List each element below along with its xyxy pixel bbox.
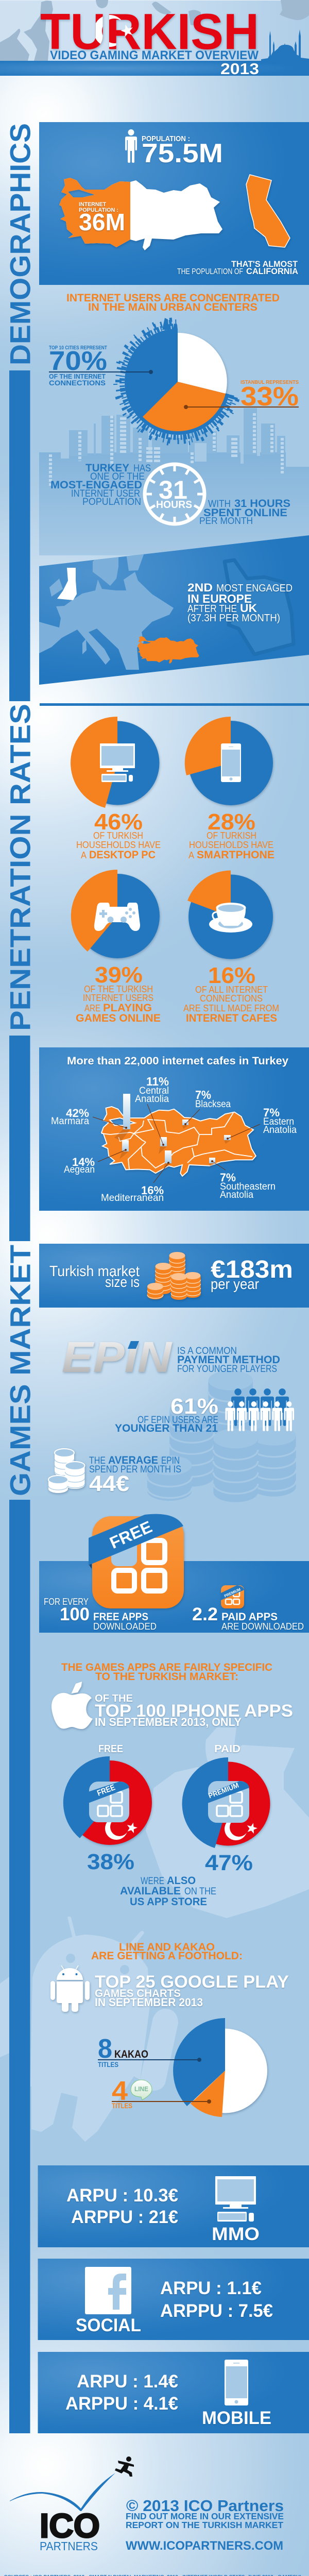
icon: checkmark swoosh xyxy=(10,2473,115,2511)
watermark: android xyxy=(0,1917,178,2142)
text: MMO values xyxy=(66,2185,178,2227)
text: 31 hours online: PER MONTH xyxy=(199,516,253,526)
text: most engaged: MOST-ENGAGED xyxy=(50,479,142,491)
text: 2nd most engaged: 2ND xyxy=(187,581,213,594)
icon: free app: FREE xyxy=(96,1783,116,1798)
internet population figure: 36M xyxy=(79,209,125,235)
text: 46 percent: DESKTOP PC xyxy=(89,849,156,861)
icon: runner xyxy=(115,2456,134,2477)
watermark: apple xyxy=(146,1727,309,1918)
text: 39 percent: GAMES ONLINE xyxy=(76,1012,161,1024)
chart: smartphone pie xyxy=(185,717,274,861)
icon: coffee cup xyxy=(209,903,252,933)
panel title: More than 22,000 internet cafes in Turkey xyxy=(67,1055,288,1067)
callout: 70 percent: CONNECTIONS xyxy=(49,379,106,387)
skyline ring xyxy=(115,318,240,444)
city skyline background xyxy=(39,408,309,555)
text: most engaged: TURKEY xyxy=(85,462,129,474)
text: 61 percent: YOUNGER THAN 21 xyxy=(115,1422,218,1434)
text: 2nd most engaged: AFTER THE xyxy=(187,603,237,615)
map: Turkey xyxy=(138,636,199,664)
header: title block xyxy=(0,0,309,78)
text: copyright and report: REPORT ON THE TURKISH MARKET xyxy=(126,2520,283,2530)
region labels: 7% xyxy=(195,1088,211,1101)
text: MMO values: ARPU : 10.3€ xyxy=(66,2185,178,2206)
panel: free and paid apps xyxy=(39,1514,309,1633)
icon: premium app xyxy=(207,1781,249,1823)
icon: android xyxy=(50,1965,90,2012)
value: 183m: per year xyxy=(211,1276,259,1293)
text: 46 percent xyxy=(76,809,161,861)
text: mobile values xyxy=(65,2371,178,2414)
flag crescent xyxy=(105,1817,139,1840)
callout: 70 percent: TOP 10 CITIES REPRESENT xyxy=(49,345,107,351)
text: also available: WERE xyxy=(141,1876,164,1887)
text: 61 percent: OF EPIN USERS ARE xyxy=(138,1415,218,1426)
text: 61 percent xyxy=(115,1394,218,1434)
text: 28 percent: SMARTPHONE xyxy=(197,849,274,861)
text: copyright and report: WWW.ICOPARTNERS.COM xyxy=(126,2539,283,2553)
icon: free app xyxy=(89,1514,184,1608)
text: 31 hours online: WITH xyxy=(208,499,231,510)
mosque silhouette xyxy=(261,29,309,61)
icon: free app xyxy=(88,1782,129,1822)
panel: market size xyxy=(39,1244,309,1308)
icon: smartphone xyxy=(221,743,241,782)
region labels: 16% xyxy=(141,1184,164,1197)
text: average EPIN spend: EPIN xyxy=(161,1455,180,1466)
map: Turkey regions xyxy=(101,1107,256,1176)
map: California xyxy=(246,175,290,247)
text: 2nd most engaged: UK xyxy=(240,602,257,615)
text: 46 percent: A xyxy=(81,850,87,860)
icon: desktop PC xyxy=(100,743,135,782)
subtitle: VIDEO GAMING MARKET OVERVIEW xyxy=(50,48,259,62)
population figure: POPULATION : xyxy=(142,134,190,143)
text: also available xyxy=(120,1875,216,1908)
text: top 25 Google Play xyxy=(95,1972,289,2009)
text: 31 hours online xyxy=(199,498,290,526)
text: 28 percent: OF TURKISH xyxy=(207,831,256,841)
region labels: 11% xyxy=(146,1075,169,1088)
chart: paid apps pie: PAID xyxy=(214,1743,241,1755)
icon: premium app: PREMIUM xyxy=(207,1781,240,1800)
chart: internet cafes pie xyxy=(183,871,279,1024)
side column headings: PENETRATION RATES xyxy=(4,704,36,1031)
flag star in title xyxy=(119,23,134,38)
region labels: Eastern xyxy=(263,1116,294,1127)
chart: paid apps pie xyxy=(182,1743,270,1875)
heading: line and kakao xyxy=(91,1941,243,1962)
text: average EPIN spend: 44€ xyxy=(89,1471,129,1496)
flag crescent in title xyxy=(94,15,127,47)
text: top 25 Google Play: GAMES CHARTS xyxy=(95,1988,181,1999)
text: 2nd most engaged xyxy=(187,581,293,624)
text: market size: size is xyxy=(105,1274,140,1291)
text: copyright and report: FIND OUT MORE IN OUR EXTENSIVE xyxy=(126,2511,284,2521)
panel: mobile ARPU xyxy=(38,2352,309,2433)
region labels: 7% xyxy=(220,1171,236,1184)
text: payment method: FOR YOUNGER PLAYERS xyxy=(177,1364,277,1375)
text: top 25 Google Play: TOP 25 GOOGLE PLAY xyxy=(95,1972,289,1992)
text: apps downloaded: PAID APPS xyxy=(221,1611,278,1623)
text: apps downloaded: 2.2 xyxy=(192,1604,218,1624)
callout: 4 Line titles: 4 xyxy=(112,2076,128,2106)
region labels: Blacksea xyxy=(195,1099,231,1110)
text: social values xyxy=(160,2278,273,2321)
text: most engaged xyxy=(50,462,151,507)
text: most engaged: POPULATION xyxy=(82,497,141,507)
text: 28 percent: 28% xyxy=(208,809,255,835)
region labels: 42% xyxy=(66,1107,89,1120)
icon: premium app xyxy=(221,1585,244,1608)
text: also available: ALSO xyxy=(167,1875,196,1887)
region labels: 7% xyxy=(263,1106,280,1119)
callout: 8 Kakao titles xyxy=(98,2034,201,2069)
callout: 8 Kakao titles: TITLES xyxy=(98,2060,118,2069)
side column headings: DEMOGRAPHICS xyxy=(4,123,36,365)
California text: THAT'S ALMOST xyxy=(231,259,298,269)
title: TURKISH xyxy=(40,3,259,60)
text: also available: US APP STORE xyxy=(130,1896,207,1908)
California text xyxy=(177,259,298,276)
label: MMO: MMO xyxy=(212,2224,260,2244)
text: 28 percent: A xyxy=(188,850,194,860)
text: 16 percent: OF ALL INTERNET xyxy=(195,985,268,995)
callout: 70 percent xyxy=(49,345,153,387)
region labels: Mediterranean xyxy=(101,1193,164,1204)
text: top 100 iPhone apps: TOP 100 IPHONE APPS xyxy=(95,1701,293,1721)
callout: 33 percent: 33% xyxy=(241,382,299,412)
text: apps downloaded xyxy=(44,1597,304,1632)
panel: population xyxy=(39,122,309,285)
text: 16 percent: INTERNET CAFES xyxy=(186,1012,277,1024)
text: 31 hours online: SPENT ONLINE xyxy=(203,507,287,519)
divider xyxy=(40,703,309,706)
logo: ICO Partners: PARTNERS xyxy=(40,2539,98,2553)
panel: MMO ARPU xyxy=(38,2165,309,2247)
text: 39 percent: PLAYING xyxy=(103,1002,152,1014)
chart: free apps pie: FREE xyxy=(98,1743,123,1755)
side column headings xyxy=(4,123,36,2433)
heading: line and kakao: ARE GETTING A FOOTHOLD: xyxy=(91,1950,243,1962)
internet population figure: POPULATION : xyxy=(79,207,118,213)
text: 61 percent: 61% xyxy=(170,1394,218,1419)
map: UK xyxy=(57,568,77,600)
text: apps downloaded: ARE DOWNLOADED xyxy=(221,1621,304,1632)
map: Turkey internet population xyxy=(59,178,222,250)
logo: ICO Partners: ICO xyxy=(40,2506,100,2545)
icon: cursor watermark xyxy=(225,560,294,654)
text: 39 percent: 39% xyxy=(95,962,143,988)
icon: free app: FREE xyxy=(107,1517,155,1552)
side column headings: GAMES MARKET xyxy=(4,1245,36,1496)
map: Europe xyxy=(39,552,199,670)
text: copyright and report: © 2013 ICO Partners xyxy=(126,2497,284,2515)
heading: urban centers: INTERNET USERS ARE CONCENTRATED xyxy=(66,292,280,304)
text: 39 percent: ARE xyxy=(84,1003,100,1013)
chart: Kakao and Line pie xyxy=(98,2018,267,2117)
text: 28 percent xyxy=(188,809,274,861)
region labels: Central xyxy=(139,1086,169,1096)
logo: EPIN: EPIN xyxy=(62,1333,173,1381)
text: payment method: IS A COMMON xyxy=(177,1346,237,1357)
text: 39 percent: INTERNET USERS xyxy=(83,993,153,1003)
panel: Europe ranking xyxy=(39,535,309,685)
heading: urban centers: IN THE MAIN URBAN CENTERS xyxy=(88,301,258,313)
text: top 100 iPhone apps: IN SEPTEMBER 2013, ONLY xyxy=(95,1716,242,1728)
chart: internet connections pie xyxy=(49,318,299,444)
heading: urban centers xyxy=(66,292,280,313)
callout: 70 percent: 70% xyxy=(49,346,107,376)
icon: clock 31 hours: HOURS xyxy=(156,499,192,511)
callout: 8 Kakao titles: KAKAO xyxy=(114,2048,148,2060)
callout: 33 percent: ISTANBUL REPRESENTS xyxy=(241,379,299,385)
panel: internet cafes map xyxy=(39,1047,309,1211)
icon: game controller xyxy=(94,903,140,931)
callout: 4 Line titles: TITLES xyxy=(112,2102,132,2110)
text: 46 percent: HOUSEHOLDS HAVE xyxy=(76,840,161,850)
text: apps downloaded: FREE APPS xyxy=(93,1611,148,1623)
text: top 25 Google Play: IN SEPTEMBER 2013 xyxy=(95,1996,203,2009)
text: 46 percent: OF TURKISH xyxy=(93,831,143,841)
header game silhouettes xyxy=(0,0,309,61)
heading: fairly specific: TO THE TURKISH MARKET: xyxy=(95,1671,238,1683)
text: top 100 iPhone apps: OF THE xyxy=(95,1693,133,1704)
icon: facebook xyxy=(85,2267,131,2314)
California text: CALIFORNIA xyxy=(246,266,298,276)
text: 2nd most engaged: (37.3H PER MONTH) xyxy=(187,613,280,624)
icon: group of people xyxy=(226,1388,294,1431)
text: most engaged: ONE OF THE xyxy=(90,471,145,482)
region labels: Marmara xyxy=(51,1116,89,1127)
chart: online games pie xyxy=(71,870,161,1024)
text: 16 percent: 16% xyxy=(208,963,255,988)
text: social values: ARPPU : 7.5€ xyxy=(160,2301,273,2321)
text: most engaged: HAS xyxy=(133,463,151,474)
region labels xyxy=(51,1075,297,1204)
value: 183m xyxy=(211,1256,293,1293)
text: 46 percent: 46% xyxy=(94,809,143,835)
text: most engaged: INTERNET USER xyxy=(71,488,140,499)
heading: fairly specific: THE GAMES APPS ARE FAIRLY SPECIFIC xyxy=(61,1662,272,1673)
text: 16 percent: ARE STILL MADE FROM xyxy=(183,1003,279,1013)
text: payment method xyxy=(177,1346,280,1375)
text: average EPIN spend: SPEND PER MONTH IS xyxy=(89,1464,181,1475)
California text: THE POPULATION OF xyxy=(177,267,243,276)
heading: fairly specific xyxy=(61,1662,272,1683)
bars and leader lines xyxy=(93,1094,260,1183)
text: apps downloaded: DOWNLOADED xyxy=(93,1621,157,1632)
logo: ICO Partners xyxy=(10,2456,134,2553)
heading: line and kakao: LINE AND KAKAO xyxy=(119,1941,215,1953)
value: 38 percent: 38% xyxy=(87,1850,134,1874)
text: 39 percent: OF THE TURKISH xyxy=(84,984,153,994)
internet population figure: INTERNET xyxy=(79,201,106,208)
panel: social ARPU xyxy=(38,2259,309,2340)
icon: clock 31 hours xyxy=(145,464,204,524)
text: also available: ON THE xyxy=(184,1886,216,1897)
region labels: Anatolia xyxy=(220,1190,253,1200)
text: MMO values: ARPPU : 21€ xyxy=(71,2207,178,2227)
text: 28 percent: HOUSEHOLDS HAVE xyxy=(189,840,273,850)
chart: desktop PC pie xyxy=(71,717,161,861)
callout: 70 percent: OF THE INTERNET xyxy=(49,372,106,380)
callout: 4 Line titles: LINE xyxy=(134,2085,148,2093)
value: 47 percent: 47% xyxy=(205,1851,253,1875)
flag crescent xyxy=(225,1818,259,1840)
text: mobile values: ARPPU : 4.1€ xyxy=(65,2394,178,2414)
text: payment method: PAYMENT METHOD xyxy=(177,1354,280,1366)
text: market size: Turkish market xyxy=(49,1263,140,1280)
label: social: SOCIAL xyxy=(76,2315,141,2335)
population figure: 75.5M xyxy=(142,139,223,168)
text: 2nd most engaged: IN EUROPE xyxy=(187,592,252,605)
label: mobile: MOBILE xyxy=(202,2408,271,2428)
text: average EPIN spend: AVERAGE xyxy=(108,1454,158,1466)
region labels: Anatolia xyxy=(135,1094,169,1105)
text: 2nd most engaged: MOST ENGAGED xyxy=(216,583,293,594)
band xyxy=(0,61,309,76)
icon: white coins xyxy=(48,1449,84,1493)
icon: person xyxy=(125,129,137,163)
icon: smartphone xyxy=(225,2360,248,2405)
text: 16 percent: CONNECTIONS xyxy=(200,993,263,1004)
icon: coin stacks xyxy=(147,1252,201,1300)
text: average EPIN spend xyxy=(89,1454,181,1496)
text: copyright and report xyxy=(126,2497,284,2553)
icon: desktop PC xyxy=(215,2176,256,2222)
text: top 100 iPhone apps xyxy=(95,1693,293,1728)
region labels: Southeastern xyxy=(220,1181,276,1192)
text: 39 percent xyxy=(76,962,161,1024)
region labels: Anatolia xyxy=(263,1125,297,1136)
text: average EPIN spend: THE xyxy=(89,1455,106,1466)
text: social values: ARPU : 1.1€ xyxy=(160,2278,262,2298)
callout: 4 Line titles xyxy=(112,2076,211,2110)
text: market size xyxy=(49,1263,140,1291)
callout: 33 percent xyxy=(184,379,299,412)
text: mobile values: ARPU : 1.4€ xyxy=(77,2371,178,2392)
text: 16 percent xyxy=(183,963,279,1024)
chart: free apps pie xyxy=(63,1743,152,1874)
icon: apple xyxy=(52,1682,93,1729)
value: 183m: €183m xyxy=(211,1256,293,1283)
year: 2013 xyxy=(220,60,259,78)
text: also available: AVAILABLE xyxy=(120,1885,181,1897)
text: apps downloaded: 100 xyxy=(60,1604,90,1624)
region labels: 14% xyxy=(72,1156,95,1168)
text: 31 hours online: 31 HOURS xyxy=(234,498,290,510)
text: apps downloaded: FOR EVERY xyxy=(44,1597,89,1607)
callout: 8 Kakao titles: 8 xyxy=(98,2034,112,2064)
icon: clock 31 hours: 31 xyxy=(159,476,187,504)
region labels: Aegean xyxy=(64,1164,95,1175)
icon: premium app: PREMIUM xyxy=(224,1587,242,1598)
watermark: coins xyxy=(147,1370,296,1502)
